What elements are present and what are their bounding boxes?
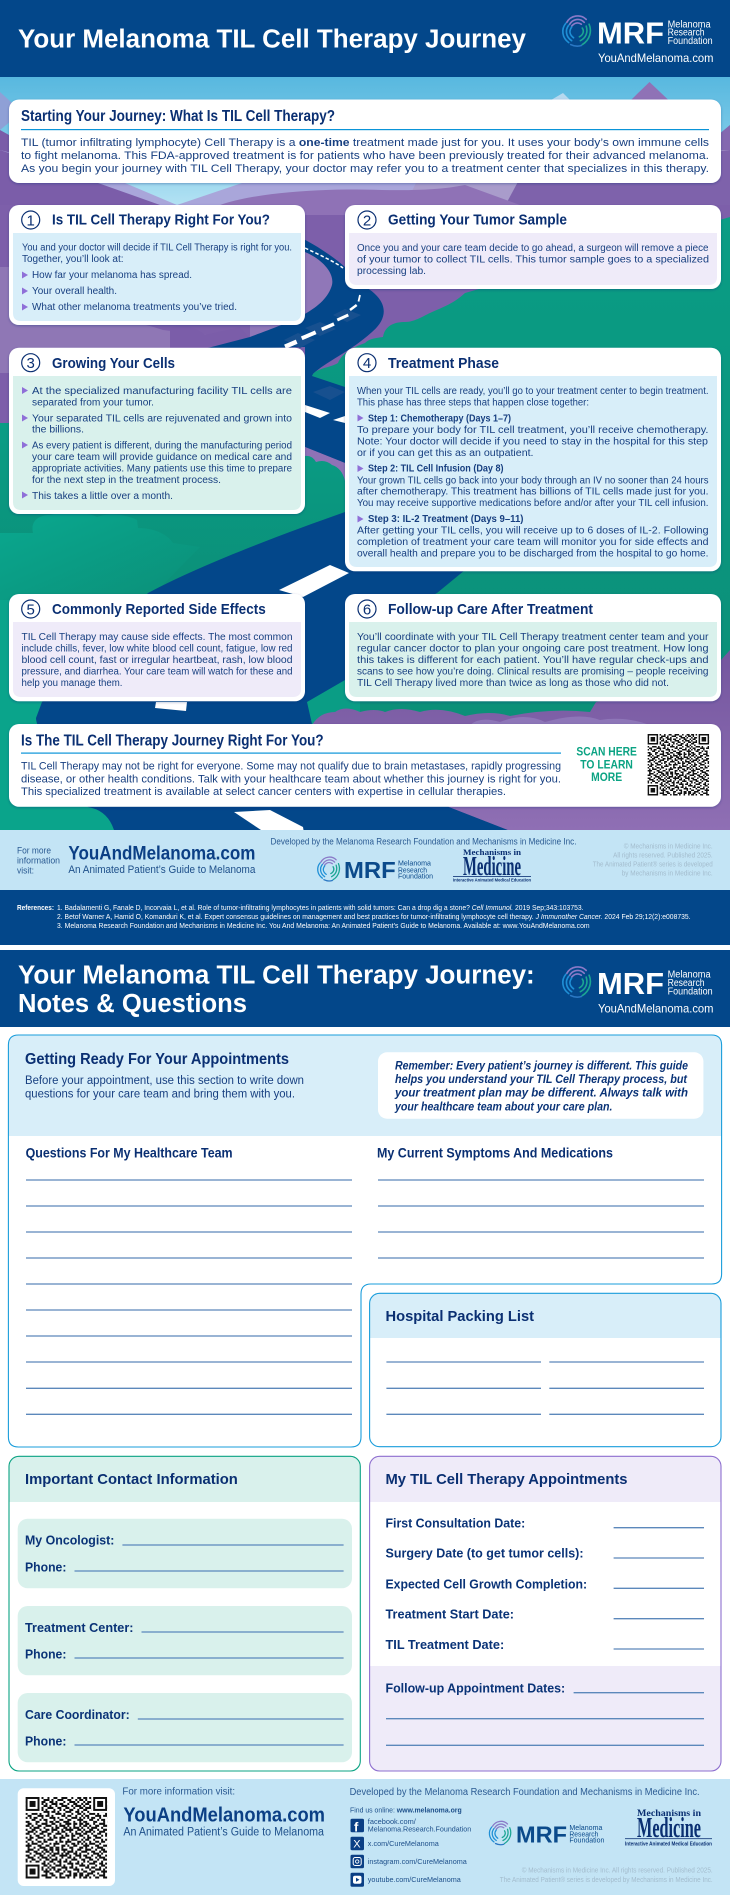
callout: remember xyxy=(378,1052,703,1119)
step 4 text: after chemotherapy. This treatment has billions of TIL cells made just for you. xyxy=(357,487,708,498)
road: upper curve xyxy=(200,228,384,463)
step 3 text: for the next step in the treatment process. xyxy=(32,475,221,486)
step 1 text: Your overall health. xyxy=(32,286,117,297)
step number 3: 3 xyxy=(27,355,35,372)
step 3 text: Your separated TIL cells are rejuvenated and grown into xyxy=(32,413,292,424)
step number 6: 6 xyxy=(363,602,371,618)
scan callout xyxy=(576,746,637,784)
step 2 title: Getting Your Tumor Sample xyxy=(388,212,567,229)
panel: step 2 xyxy=(345,205,721,289)
step number 4: 4 xyxy=(363,355,371,372)
step 2 text: processing lab. xyxy=(357,266,426,277)
panel: step 1 xyxy=(9,205,305,325)
references: 1. Badalamenti G, Fanale D, Incorvaia L, et al. Role of tumor-infiltrating lymphocytes in patients with solid tumors: Can a drop dig a stone? Cell Immunol. 2019 Sep;343:103753. xyxy=(57,905,584,912)
panel: step 4 xyxy=(345,348,721,571)
intro text: to fight melanoma. This FDA-approved treatment is for patients who have been previously treated for their advanced melanoma. xyxy=(21,150,709,162)
logo: MRF: Research xyxy=(668,28,705,39)
step 4 text: To prepare your body for TIL cell treatment, you’ll receive chemotherapy. xyxy=(357,425,708,436)
references: References: xyxy=(17,905,54,912)
step 6 text: this takes is different for each patient. You’ll have regular check-ups and xyxy=(357,655,708,666)
body text xyxy=(21,760,561,798)
step 5 text xyxy=(22,632,292,689)
step 6 text: scans to see how you’re doing. Clinical results are promising – people receiving xyxy=(357,666,708,677)
step 3 text: appropriate activities. Many patients use this time to prepare xyxy=(32,464,292,475)
icon: instagram xyxy=(350,1855,364,1868)
step 6 title: Follow-up Care After Treatment xyxy=(388,601,593,618)
callout: remember: helps you understand your TIL Cell Therapy process, but xyxy=(395,1074,688,1086)
heading: Starting Your Journey: What Is TIL Cell Therapy? xyxy=(21,108,335,125)
copyright xyxy=(500,1866,713,1884)
step 3 text: the billions. xyxy=(32,425,84,436)
developed by: Developed by the Melanoma Research Foundation and Mechanisms in Medicine Inc. xyxy=(270,836,576,846)
step 1 text: What other melanoma treatments you’ve tried. xyxy=(32,302,237,313)
icon: X: X xyxy=(353,1838,361,1850)
logo: MRF: Foundation xyxy=(668,36,713,47)
logo: MRF: YouAndMelanoma.com xyxy=(598,51,714,65)
step 4 text: or if you can get this as an outpatient. xyxy=(357,448,534,459)
references xyxy=(0,890,730,945)
panel: hospital packing list xyxy=(370,1293,721,1447)
hill: inside road bend xyxy=(250,252,332,337)
references: 3. Melanoma Research Foundation and Mechanisms in Medicine Inc. You And Melanoma: An Animated Patient’s Guide to Melanoma. Available at: www.YouAndMelanoma.com xyxy=(57,923,590,930)
contact: care coordinator: Care Coordinator: xyxy=(25,1707,130,1722)
logo: MRF xyxy=(563,966,714,1015)
step 4 text: This phase has three steps that happen close together: xyxy=(357,398,589,409)
step number 6 xyxy=(358,600,376,618)
logo: Mechanisms in Medicine: Interactive Animated Medical Education xyxy=(625,1842,712,1848)
step 5 text: pressure, and diarrhea. Your care team will watch for these and xyxy=(22,666,292,677)
step 3 title: Growing Your Cells xyxy=(52,355,175,372)
heading: My TIL Cell Therapy Appointments xyxy=(386,1471,628,1488)
step 4 text: Step 1: Chemotherapy (Days 1–7) xyxy=(368,413,511,424)
hills: lower-right purple xyxy=(312,650,730,830)
social links: Find us online: www.melanoma.org xyxy=(350,1806,462,1815)
step 6 text xyxy=(357,632,709,689)
scan callout: MORE xyxy=(591,772,622,784)
copyright xyxy=(593,842,713,877)
website: An Animated Patient’s Guide to Melanoma xyxy=(68,864,256,876)
road: lower sweep xyxy=(36,512,508,830)
social links: Melanoma.Research.Foundation xyxy=(368,1824,471,1833)
for more information: For more xyxy=(17,845,51,856)
panel: step 5 xyxy=(9,594,305,701)
logo: MRF: YouAndMelanoma.com xyxy=(598,1001,714,1015)
date fields: Expected Cell Growth Completion: xyxy=(386,1576,587,1591)
scan callout: SCAN HERE xyxy=(576,746,637,758)
step 5 text: include chills, fever, low white blood cell count, fatigue, low red xyxy=(22,643,292,654)
contact: oncologist: Phone: xyxy=(25,1559,66,1574)
hill: bright bumps xyxy=(0,513,200,600)
step 4 text: You may receive supportive medications before and/or after your TIL cell infusion. xyxy=(357,498,708,509)
logo: MRF: MRF xyxy=(516,1821,567,1847)
step 3 text xyxy=(22,386,292,502)
background landscape xyxy=(0,77,730,830)
contact: treatment center: Phone: xyxy=(25,1646,66,1661)
logo: Mechanisms in Medicine: Mechanisms in xyxy=(637,1809,702,1819)
copyright: by Mechanisms in Medicine Inc. xyxy=(622,868,713,877)
step number 1: 1 xyxy=(27,212,35,230)
contact: oncologist xyxy=(18,1519,352,1588)
symptoms section xyxy=(377,1144,704,1258)
footer: page one xyxy=(0,830,730,890)
step number 1 xyxy=(22,211,40,230)
logo: MRF: Melanoma xyxy=(569,1823,603,1832)
step 4 text: When your TIL cells are ready, you’ll go to your treatment center to begin treatment. xyxy=(357,386,708,397)
callout: remember: Remember: Every patient’s journey is different. This guide xyxy=(395,1060,689,1072)
step 1 text xyxy=(22,243,292,313)
social links: x.com/CureMelanoma xyxy=(368,1839,440,1848)
contact: care coordinator xyxy=(18,1693,352,1762)
header: page two xyxy=(0,950,730,1027)
step 4 text: After getting your TIL cells, you will receive up to 6 doses of IL-2. Following xyxy=(357,526,708,537)
step 4 text: Note: Your doctor will decide if you need to stay in the hospital for this step xyxy=(357,436,708,447)
website: YouAndMelanoma.com xyxy=(68,843,255,864)
social links: youtube.com/CureMelanoma xyxy=(368,1875,462,1884)
footer: page two xyxy=(0,1779,730,1895)
step 5 text: TIL Cell Therapy may cause side effects. The most common xyxy=(22,632,292,643)
logo: MRF xyxy=(489,1821,604,1847)
intro text xyxy=(21,137,710,175)
intro text: Before your appointment, use this section to write down xyxy=(25,1075,304,1087)
step 1 text: You and your doctor will decide if TIL Cell Therapy is right for you. xyxy=(22,243,292,254)
website: YouAndMelanoma.com xyxy=(123,1804,325,1826)
questions section: Questions For My Healthcare Team xyxy=(26,1144,233,1160)
logo: MRF: Foundation xyxy=(398,872,433,881)
heading: Is The TIL Cell Therapy Journey Right For You? xyxy=(21,732,324,749)
date fields: Treatment Start Date: xyxy=(386,1607,514,1622)
intro text: TIL (tumor infiltrating lymphocyte) Cell Therapy is a one-time treatment made just for you. It uses your body’s own immune cells xyxy=(21,137,710,149)
logo: MRF: Melanoma xyxy=(668,19,711,30)
questions section xyxy=(26,1144,352,1414)
title: Your Melanoma TIL Cell Therapy Journey: xyxy=(18,961,535,989)
contact: treatment center: Treatment Center: xyxy=(25,1620,134,1635)
logo: MRF: Research xyxy=(398,865,427,874)
QR code xyxy=(622,734,730,811)
panel: appointments xyxy=(370,1456,721,1771)
hills: right teal xyxy=(312,217,730,725)
date fields xyxy=(386,1515,704,1652)
contact: treatment center xyxy=(18,1606,352,1675)
panel: is the journey right for you xyxy=(9,724,730,811)
scan callout: TO LEARN xyxy=(580,759,633,771)
step 3 text: As every patient is different, during the manufacturing period xyxy=(32,441,292,452)
logo: MRF: Research xyxy=(668,978,705,989)
date fields: TIL Treatment Date: xyxy=(386,1637,504,1652)
QR card xyxy=(0,1788,141,1895)
logo: Mechanisms in Medicine: Interactive Animated Medical Education xyxy=(453,878,531,883)
logo: MRF: MRF xyxy=(344,857,396,883)
logo: MRF: Melanoma xyxy=(668,970,711,981)
heading: Hospital Packing List xyxy=(386,1308,534,1325)
logo: MRF xyxy=(563,16,714,65)
developed by: Developed by the Melanoma Research Foundation and Mechanisms in Medicine Inc. xyxy=(350,1787,700,1798)
body text: disease, or other health conditions. Talk with your healthcare team about whether this journey is right for you. xyxy=(21,773,561,785)
step 5 title: Commonly Reported Side Effects xyxy=(52,601,266,618)
intro text: questions for your care team and bring them with you. xyxy=(25,1089,295,1101)
title: Notes & Questions xyxy=(18,990,247,1018)
social links xyxy=(350,1806,471,1887)
step 2 text xyxy=(357,243,709,277)
step 3 text: your care team will provide guidance on medical care and xyxy=(32,452,292,463)
step 2 text: of your tumor to collect TIL cells. This tumor sample goes to a specialized xyxy=(357,255,709,266)
body text: TIL Cell Therapy may not be right for everyone. Some may not qualify due to brain metastases, rapidly progressing xyxy=(21,760,561,772)
step 4 text: overall health and prepare you to be discharged from the hospital to go home. xyxy=(357,549,708,560)
website: An Animated Patient’s Guide to Melanoma xyxy=(123,1827,325,1839)
follow-up dates: Follow-up Appointment Dates: xyxy=(386,1681,565,1696)
step 6 text: You’ll coordinate with your TIL Cell Therapy treatment center team and your xyxy=(357,632,709,643)
callout: remember: your treatment plan may be different. Always talk with xyxy=(394,1088,688,1100)
body text: This specialized treatment is available at select cancer centers with expertise in cellular therapies. xyxy=(21,786,506,798)
step 1 text: Together, you’ll look at: xyxy=(22,254,124,265)
step 1 text: How far your melanoma has spread. xyxy=(32,270,192,281)
step 4 text: Step 3: IL-2 Treatment (Days 9–11) xyxy=(368,514,524,525)
logo: Mechanisms in Medicine: Mechanisms in xyxy=(463,847,521,857)
website xyxy=(122,1787,325,1839)
step 3 text: At the specialized manufacturing facility TIL cells are xyxy=(32,386,292,397)
step 5 text: blood cell count, fast or irregular heartbeat, rash, low blood xyxy=(22,655,292,666)
hills: left teal xyxy=(0,423,345,600)
social links: instagram.com/CureMelanoma xyxy=(368,1857,468,1866)
logo: MRF: Research xyxy=(569,1829,598,1838)
logo: Mechanisms in Medicine: Medicine xyxy=(463,851,521,881)
date fields: First Consultation Date: xyxy=(386,1515,525,1530)
copyright: © Mechanisms in Medicine Inc. xyxy=(624,842,713,851)
heading: Important Contact Information xyxy=(25,1471,238,1488)
logo: MRF: MRF xyxy=(597,16,664,51)
for more information: visit: xyxy=(17,865,34,876)
step 6 text: regular cancer doctor to plan your ongoing care post treatment. How long xyxy=(357,643,708,654)
copyright: All rights reserved. Published 2025. xyxy=(613,851,713,860)
icon: facebook: f xyxy=(354,1820,359,1834)
road shadows xyxy=(284,309,361,400)
step number 3 xyxy=(22,354,40,372)
heading: Getting Ready For Your Appointments xyxy=(25,1051,289,1068)
website: For more information visit: xyxy=(122,1787,235,1798)
follow-up dates xyxy=(386,1681,704,1745)
step 4 text: Your grown TIL cells go back into your body through an IV no sooner than 24 hours xyxy=(357,475,708,486)
references: 2. Betof Warner A, Hamid O, Komanduri K, et al. Expert consensus guidelines on management and best practices for tumor-infiltrating lymphocyte cell therapy. J Immunother Cancer. 2024 Feb 29;12(2):e008735. xyxy=(57,914,691,921)
step number 5: 5 xyxy=(27,602,35,618)
step 4 text: completion of treatment your care team will monitor you for side effects and xyxy=(357,537,708,548)
social links: facebook.com/ xyxy=(368,1817,417,1826)
website xyxy=(68,843,256,876)
intro text: As you begin your journey with TIL Cell Therapy, your doctor may refer you to a treatment center that specializes in this therapy. xyxy=(21,163,709,175)
panel: starting your journey xyxy=(9,100,721,183)
step 6 text: TIL Cell Therapy lived more than twice as long as those who did not. xyxy=(357,678,669,689)
panel: step 6 xyxy=(345,594,721,701)
step number 4 xyxy=(358,354,376,372)
intro text xyxy=(25,1075,304,1101)
contact: care coordinator: Phone: xyxy=(25,1733,66,1748)
step 4 text: Step 2: TIL Cell Infusion (Day 8) xyxy=(368,464,504,475)
for more information xyxy=(17,845,60,876)
logo: Mechanisms in Medicine xyxy=(453,847,531,883)
logo: MRF: MRF xyxy=(597,966,664,1001)
logo: Mechanisms in Medicine xyxy=(625,1809,712,1848)
logo: MRF: Foundation xyxy=(668,986,713,997)
panel: step 3 xyxy=(9,348,305,514)
step number 2 xyxy=(358,211,376,230)
symptoms section: My Current Symptoms And Medications xyxy=(377,1144,613,1160)
step 5 text: help you manage them. xyxy=(22,678,122,689)
logo: MRF: Foundation xyxy=(569,1836,604,1845)
title: Your Melanoma TIL Cell Therapy Journey xyxy=(18,26,527,54)
step number 2: 2 xyxy=(363,212,371,230)
step 4 text xyxy=(357,386,708,560)
header: page one xyxy=(0,0,730,77)
road markings xyxy=(155,248,360,830)
icon: youtube xyxy=(350,1873,364,1887)
logo: MRF xyxy=(318,857,433,883)
panel: getting ready for appointments xyxy=(8,1035,722,1447)
date fields: Surgery Date (to get tumor cells): xyxy=(386,1546,584,1561)
step 3 text: separated from your tumor. xyxy=(32,398,154,409)
step number 5 xyxy=(22,600,40,618)
title xyxy=(18,961,535,1018)
step 1 title: Is TIL Cell Therapy Right For You? xyxy=(52,212,270,229)
step 4 title: Treatment Phase xyxy=(388,355,499,372)
panel: important contact information xyxy=(9,1456,360,1771)
contact: oncologist: My Oncologist: xyxy=(25,1533,114,1548)
logo: MRF: Melanoma xyxy=(398,859,432,868)
step 2 text: Once you and your care team decide to go ahead, a surgeon will remove a piece xyxy=(357,243,709,254)
for more information: information xyxy=(17,855,60,866)
step 3 text: This takes a little over a month. xyxy=(32,491,173,502)
callout: remember: your healthcare team about your care plan. xyxy=(394,1101,612,1113)
